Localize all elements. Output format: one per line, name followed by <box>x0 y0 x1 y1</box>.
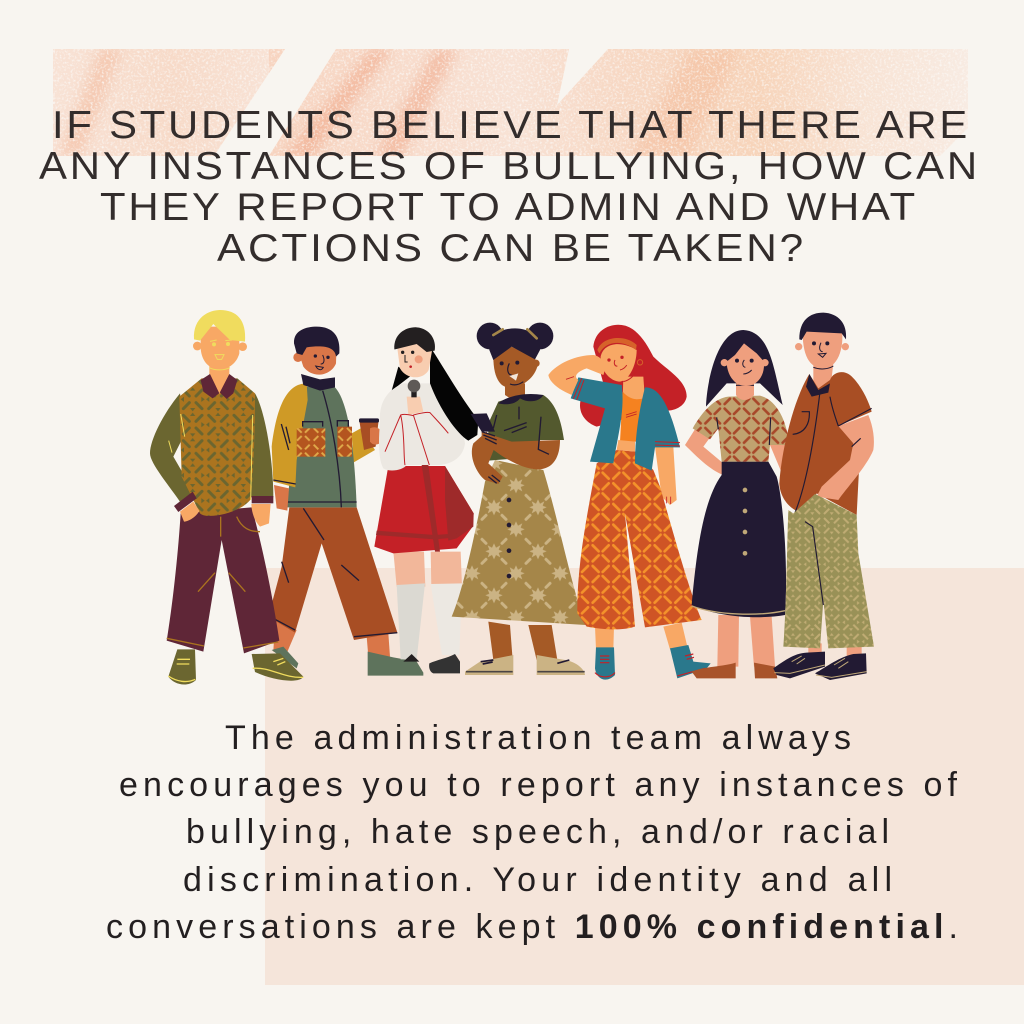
body text: The administration team always <box>225 719 851 757</box>
illustration: group of seven students <box>150 310 874 685</box>
body text <box>106 719 958 946</box>
title: THEY REPORT TO ADMIN AND WHAT <box>100 186 918 229</box>
student 6: girl in navy button skirt <box>685 330 789 678</box>
body text: discrimination. Your identity and all <box>183 861 892 899</box>
student 5: red-haired girl with teal jacket <box>548 325 711 680</box>
title: IF STUDENTS BELIEVE THAT THERE ARE <box>52 104 970 147</box>
student 4: girl with buns holding phone <box>452 323 586 675</box>
watercolour brush banner <box>53 49 968 156</box>
body text: conversations are kept 100% confidential. <box>106 908 958 946</box>
body text: bullying, hate speech, and/or racial <box>186 813 889 851</box>
panel: lower right peach block <box>265 568 1024 985</box>
student 7: boy in rust shirt and khaki trousers <box>773 313 874 680</box>
body text: encourages you to report any instances of <box>119 766 958 804</box>
title: ACTIONS CAN BE TAKEN? <box>217 227 806 270</box>
student 3: girl with microphone and red skirt <box>374 327 478 673</box>
title: ANY INSTANCES OF BULLYING, HOW CAN <box>39 145 980 188</box>
title <box>39 104 980 270</box>
student 2: boy with coffee cup <box>268 327 423 676</box>
student 1: blond boy in patterned vest <box>150 310 303 685</box>
